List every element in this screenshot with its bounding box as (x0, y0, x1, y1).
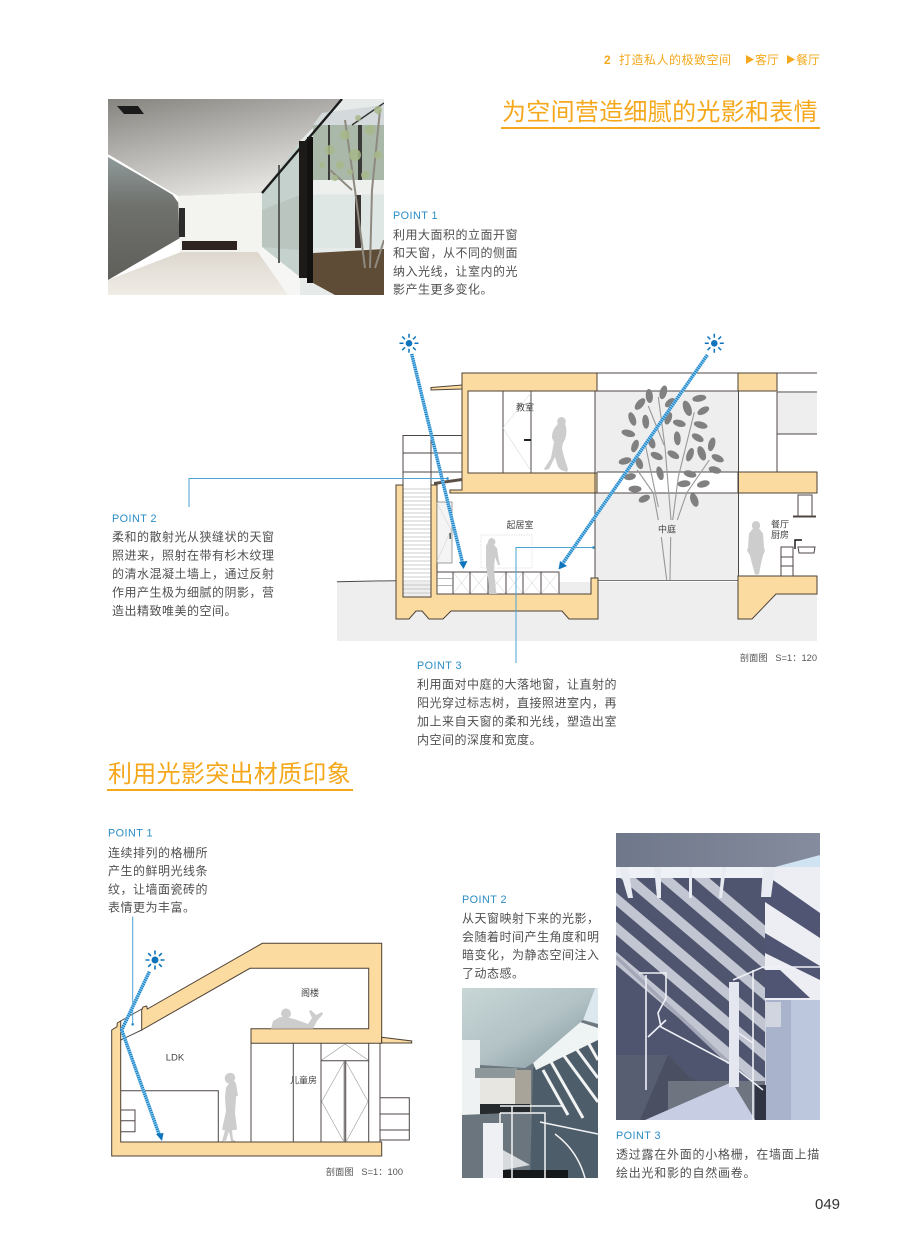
room labels: 厨房 (771, 529, 789, 540)
text block: top point 2: POINT 2 (112, 513, 157, 525)
text block: top point 3 (417, 660, 617, 747)
room labels (166, 987, 319, 1085)
lower canopy (434, 478, 462, 485)
text block: lower point 2: POINT 2 (462, 894, 507, 906)
text block: lower point 3: 绘出光和影的自然画卷。 (616, 1165, 756, 1180)
room labels (506, 402, 789, 540)
interior partitions (121, 1043, 380, 1142)
silhouette: standing person (222, 1073, 238, 1142)
running header: 打造私人的极致空间 (619, 52, 732, 67)
photo: lattice shadows on tiled wall (616, 833, 820, 1120)
canopy (431, 385, 462, 390)
text block: top point 1: POINT 1 (393, 210, 438, 222)
running header: 2 (604, 53, 611, 67)
text block: lower point 2 (462, 894, 600, 980)
text block: lower point 3 (616, 1130, 820, 1180)
heading: top section: 为空间营造细腻的光影和表情 (502, 99, 818, 126)
room labels: LDK (166, 1052, 185, 1064)
text block: top point 2: 作用产生极为细腻的阴影，营 (112, 584, 275, 600)
tree (618, 385, 725, 580)
concrete: upper slabs and wall (450, 373, 597, 493)
text block: top point 3: 加上来自天窗的柔和光线，塑造出室 (417, 714, 617, 728)
text block: top point 2: 造出精致唯美的空间。 (112, 603, 237, 618)
text block: top point 3: POINT 3 (417, 660, 462, 672)
text block: top point 2: 照进来，照射在带有杉木纹理 (112, 548, 275, 562)
room labels: 阁楼 (301, 987, 319, 998)
room labels: 起居室 (506, 519, 534, 530)
window outline (481, 535, 532, 568)
leader line: point 2 (189, 477, 449, 507)
text block: top point 1: 纳入光线，让室内的光 (393, 264, 518, 278)
text block: top point 3: 内空间的深度和宽度。 (417, 732, 542, 747)
room labels: 餐厅 (771, 518, 789, 530)
text block: top point 1 (393, 210, 518, 296)
scale caption: top section: 剖面图 S=1：120 (740, 652, 817, 663)
page canvas (107, 54, 840, 1209)
leader line: point 1 (131, 917, 134, 1026)
leader line: point 3 (516, 546, 595, 663)
door in bedroom (503, 393, 531, 471)
concrete: right bay (738, 373, 817, 619)
text block: top point 2 (112, 513, 275, 618)
text block: top point 1: 影产生更多变化。 (393, 282, 493, 296)
text block: lower point 2: 从天窗映射下来的光影， (462, 910, 600, 926)
kitchen fittings (781, 495, 816, 576)
roof, wall and loft floor (142, 943, 382, 1043)
silhouette: woman walking (544, 417, 568, 472)
text block: lower point 3: POINT 3 (616, 1130, 661, 1142)
shed above stair (403, 436, 462, 485)
text block: top point 2: 的清水混凝土墙上，通过反射 (112, 566, 275, 581)
page number: 049 (815, 1196, 840, 1213)
door swing lines (322, 1044, 368, 1142)
right cabinet (380, 1098, 409, 1140)
running header: 客厅 (755, 52, 779, 67)
heading: lower section: 利用光影突出材质印象 (108, 761, 351, 788)
silhouette: person in kitchen (747, 521, 765, 574)
silhouette: lying person (271, 1008, 323, 1029)
text block: top point 1: 利用大面积的立面开窗 (393, 227, 518, 242)
text block: lower point 1: POINT 1 (108, 828, 153, 840)
room labels: 儿童房 (290, 1074, 317, 1085)
stair treads (403, 489, 431, 593)
door panel in living room (437, 502, 452, 563)
text block: lower point 1: 连续排列的格栅所 (108, 845, 208, 860)
sun ray: left (412, 354, 468, 569)
canopy (382, 1037, 412, 1043)
icon: sun left (400, 334, 418, 353)
silhouette: person in living room (486, 538, 500, 594)
scale caption: lower section: 剖面图 S=1：100 (326, 1166, 403, 1177)
text block: top point 3: 阳光穿过标志树，直接照进室内，再 (417, 695, 617, 710)
photo: skylight stair hall (462, 988, 598, 1178)
text block: lower point 2: 会随着时间产生角度和明 (462, 929, 600, 944)
photo: living room with courtyard (108, 99, 384, 295)
text block: lower point 3: 透过露在外面的小格栅，在墙面上描 (616, 1146, 820, 1162)
low cabinet (437, 572, 559, 594)
ground and courtyard fill (337, 373, 817, 641)
text block: lower point 2: 了动态感。 (462, 966, 525, 980)
sun ray with reflection (122, 972, 164, 1141)
text block: lower point 1 (108, 828, 208, 914)
section drawing: attic house (112, 917, 412, 1156)
text block: top point 1: 和天窗，从不同的侧面 (393, 245, 518, 260)
icon: sun (146, 950, 164, 970)
running header (604, 52, 820, 67)
room labels: 教室 (516, 402, 534, 412)
concrete: basement and foundation (396, 485, 598, 619)
running header: 餐厅 (796, 52, 820, 67)
sun ray: right (558, 355, 707, 570)
icon: sun right (705, 334, 724, 353)
text block: lower point 2: 暗变化，为静态空间注入 (462, 947, 600, 962)
skylight frame (121, 1009, 142, 1040)
text block: lower point 1: 表情更为丰富。 (108, 900, 196, 914)
text block: top point 3: 利用面对中庭的大落地窗，让直射的 (417, 676, 617, 692)
room labels: 中庭 (658, 524, 676, 534)
text block: lower point 1: 纹，让墙面瓷砖的 (108, 882, 208, 896)
text block: top point 2: 柔和的散射光从狭缝状的天窗 (112, 529, 275, 544)
structural lines (503, 373, 817, 578)
text block: lower point 1: 产生的鲜明光线条 (108, 863, 208, 878)
section drawing: two-storey house and courtyard (189, 334, 817, 663)
floor and left wall (112, 1021, 382, 1156)
